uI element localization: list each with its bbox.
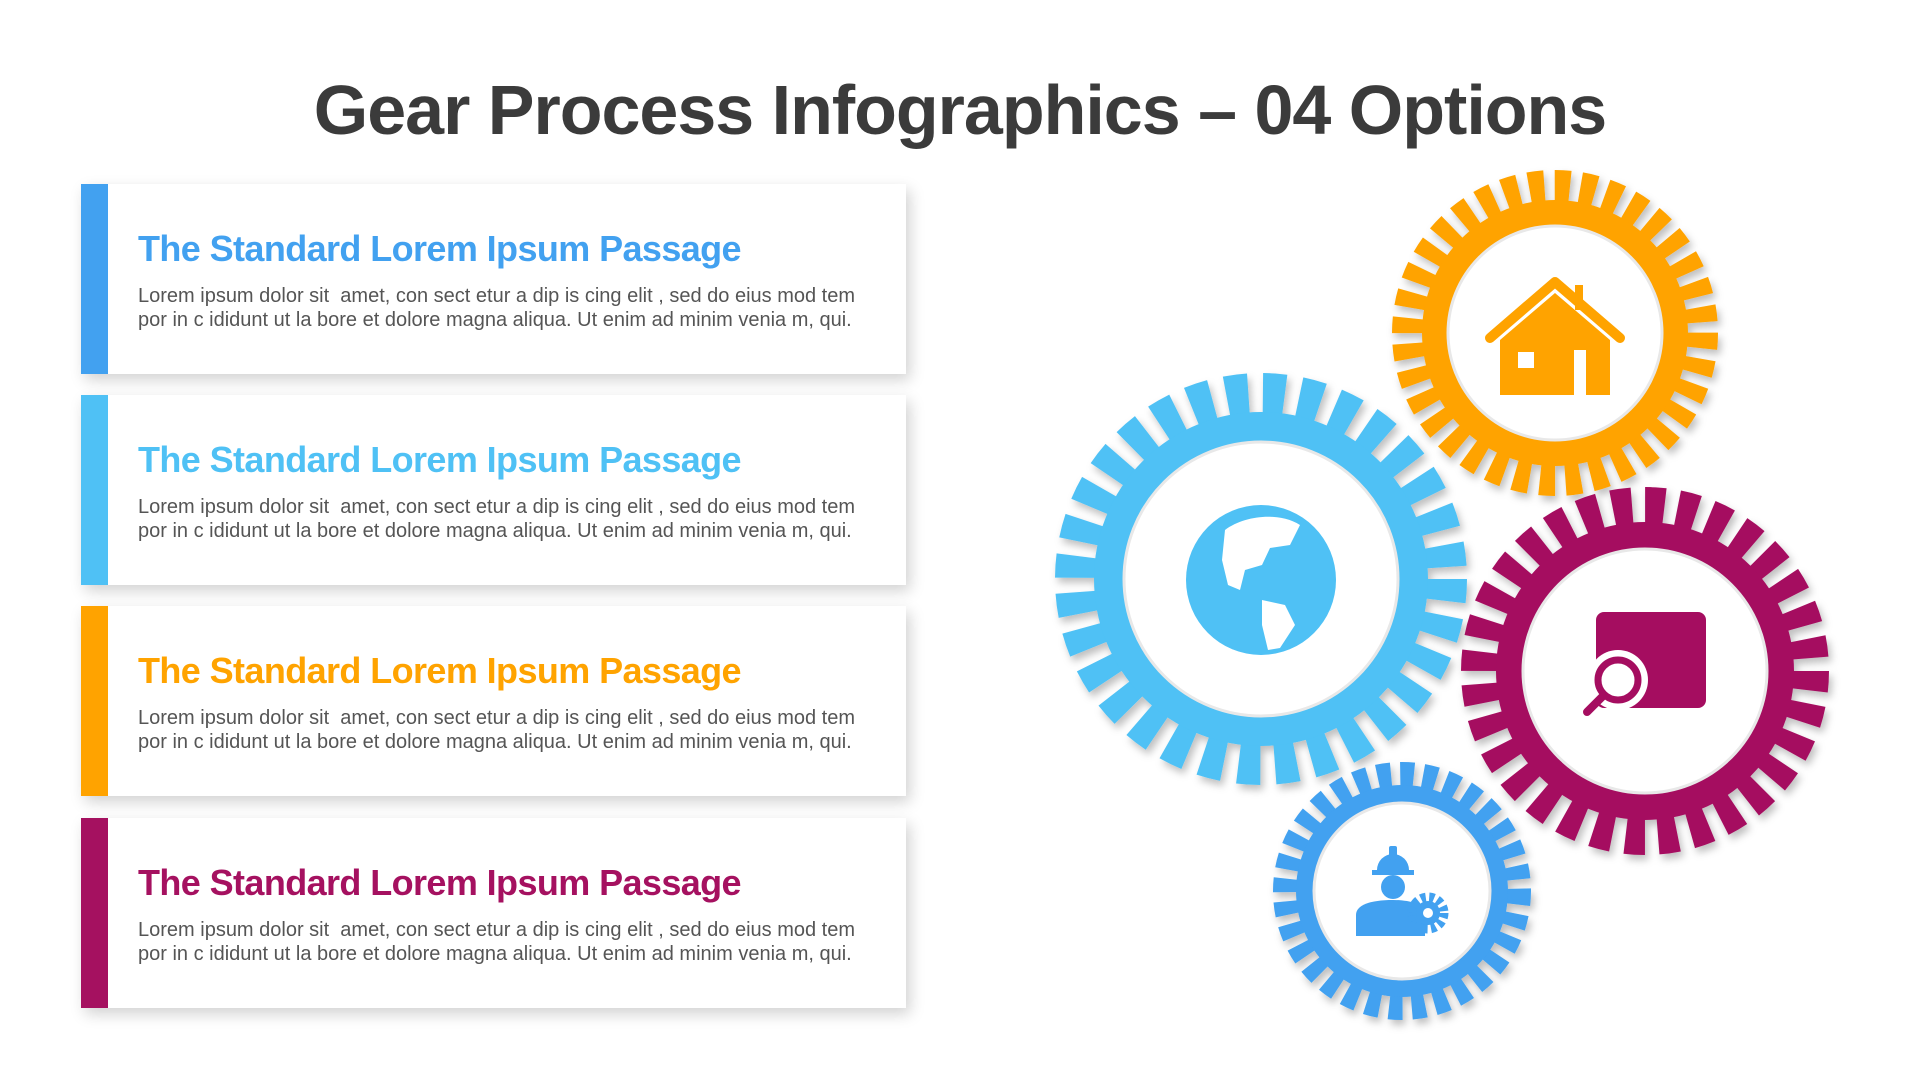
icon: worker with gear bbox=[1356, 846, 1444, 936]
icon: box with magnifier bbox=[1587, 612, 1706, 712]
title: Gear Process Infographics – 04 Options bbox=[314, 71, 1606, 149]
card 2: The Standard Lorem Ipsum Passage bbox=[138, 439, 741, 480]
gear: small blue worker bbox=[1288, 776, 1516, 1006]
card 4: The Standard Lorem Ipsum Passage bbox=[138, 862, 741, 903]
card 3: The Standard Lorem Ipsum Passage bbox=[138, 650, 741, 691]
card 3 bbox=[81, 606, 906, 796]
card 3: Lorem ipsum dolor sit amet, con sect etur a dip is cing elit , sed do eius mod tem bbox=[138, 707, 855, 729]
card 1 bbox=[81, 184, 906, 374]
icon: globe bbox=[1186, 505, 1336, 655]
gear: orange home bbox=[1410, 188, 1700, 478]
card 3: por in c ididunt ut la bore et dolore magna aliqua. Ut enim ad minim venia m, qui. bbox=[138, 731, 852, 753]
card 2 bbox=[81, 395, 906, 585]
gear: magenta box search bbox=[1483, 509, 1807, 833]
card 4: por in c ididunt ut la bore et dolore magna aliqua. Ut enim ad minim venia m, qui. bbox=[138, 943, 852, 965]
card 1: The Standard Lorem Ipsum Passage bbox=[138, 228, 741, 269]
card 4 bbox=[81, 818, 906, 1008]
card 1: por in c ididunt ut la bore et dolore magna aliqua. Ut enim ad minim venia m, qui. bbox=[138, 309, 852, 331]
card 4: Lorem ipsum dolor sit amet, con sect etur a dip is cing elit , sed do eius mod tem bbox=[138, 919, 855, 941]
card 1: Lorem ipsum dolor sit amet, con sect etur a dip is cing elit , sed do eius mod tem bbox=[138, 285, 855, 307]
icon: house bbox=[1490, 282, 1620, 395]
gear: blue globe bbox=[1079, 397, 1443, 761]
card 2: Lorem ipsum dolor sit amet, con sect etur a dip is cing elit , sed do eius mod tem bbox=[138, 496, 855, 518]
card 2: por in c ididunt ut la bore et dolore magna aliqua. Ut enim ad minim venia m, qui. bbox=[138, 520, 852, 542]
